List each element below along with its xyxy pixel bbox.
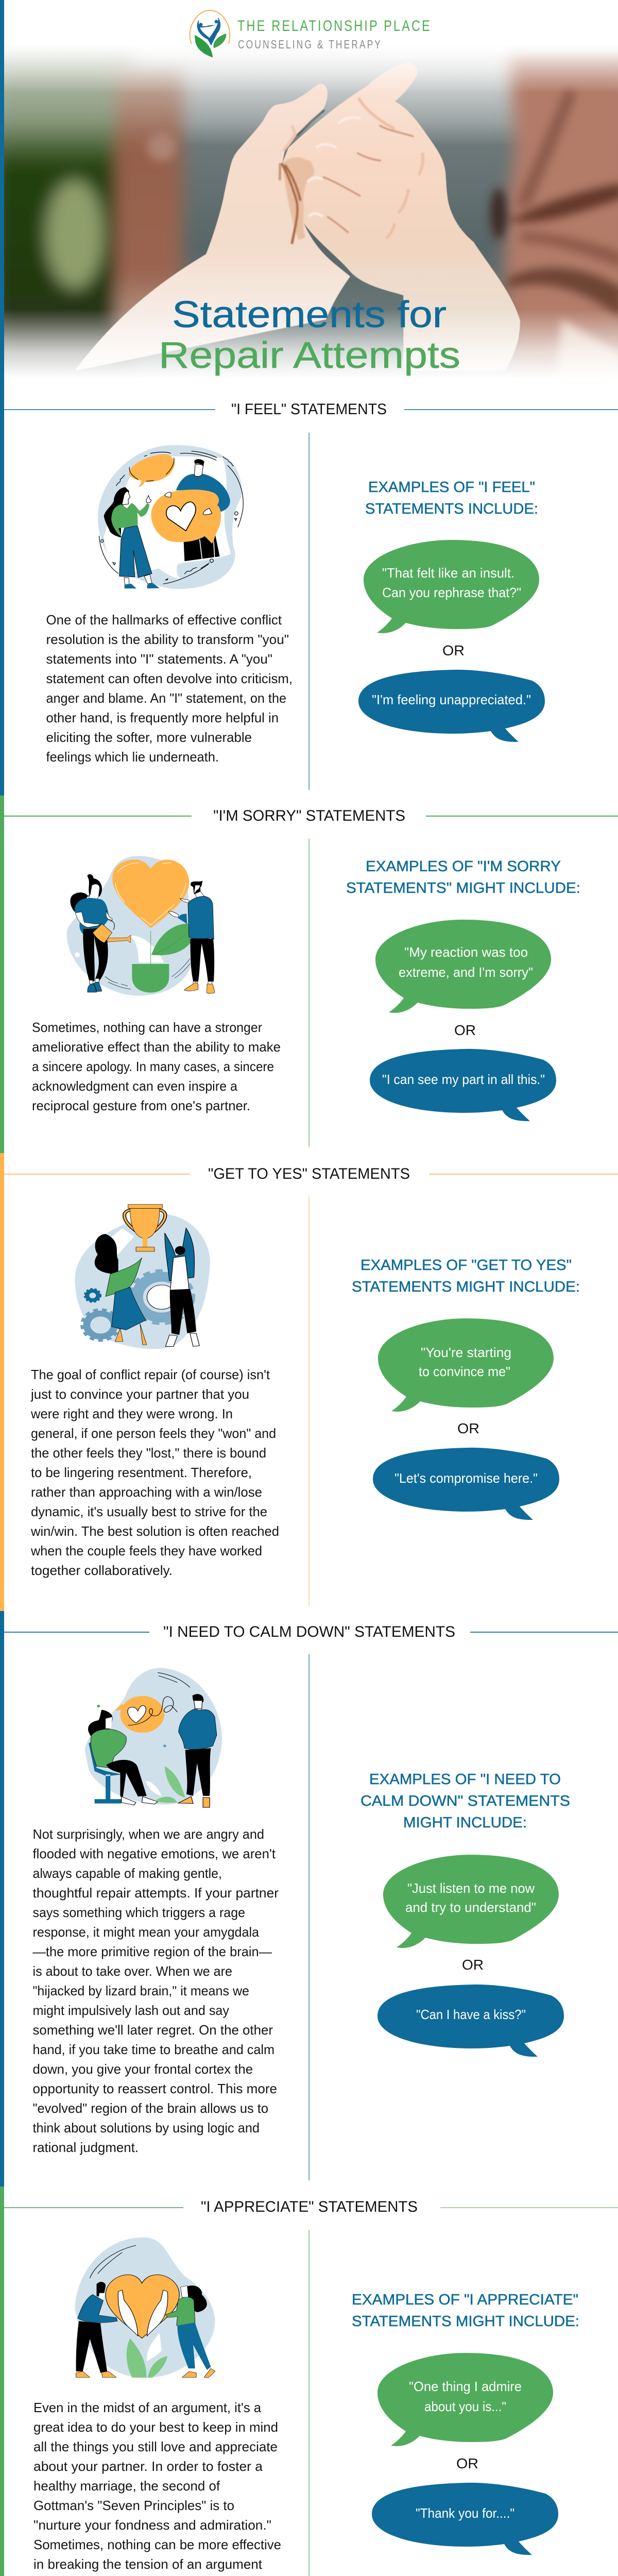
body text xyxy=(32,1020,281,1113)
examples heading: CALM DOWN" STATEMENTS xyxy=(360,1793,570,1809)
title xyxy=(159,294,460,376)
title: Statements for xyxy=(172,294,447,335)
green speech bubble: "You're starting xyxy=(421,1345,511,1360)
body text: always capable of making gentle, xyxy=(33,1866,222,1881)
green speech bubble: about you is..." xyxy=(424,2399,506,2414)
examples heading: STATEMENTS" MIGHT INCLUDE: xyxy=(346,880,580,896)
section heading: "I APPRECIATE" STATEMENTS xyxy=(201,2198,418,2215)
or label: OR xyxy=(456,2455,478,2471)
green speech bubble: "Just listen to me now xyxy=(407,1880,535,1896)
logo emblem xyxy=(190,10,230,58)
panel: I feel statements xyxy=(4,401,618,790)
body text: a sincere apology. In many cases, a sincere xyxy=(32,1059,274,1074)
body text: the other feels they "lost," there is bound xyxy=(31,1445,266,1461)
body text: something we'll later regret. On the other xyxy=(33,2022,273,2038)
illustration: couple watering a heart plant xyxy=(66,856,215,996)
panel: get to yes statements xyxy=(4,1165,618,1606)
body text: all the things you still love and appreciate xyxy=(33,2439,278,2454)
blue speech bubble: "Thank you for...." xyxy=(416,2505,514,2521)
body text: Gottman's "Seven Principles" is to xyxy=(33,2498,234,2513)
body text: Not surprisingly, when we are angry and xyxy=(33,1826,264,1842)
body text xyxy=(30,1367,279,1578)
body text: The goal of conflict repair (of course) isn't xyxy=(31,1367,270,1382)
body text: about your partner. In order to foster a xyxy=(33,2459,263,2474)
blue speech bubble: "Let's compromise here." xyxy=(394,1470,538,1486)
body text: dynamic, it's usually best to strive for the xyxy=(31,1504,267,1519)
green speech bubble xyxy=(375,920,551,1013)
body text: is about to take over. When we are xyxy=(33,1963,232,1979)
or label: OR xyxy=(454,1022,476,1038)
green speech bubble xyxy=(377,2353,553,2446)
blue speech bubble: "I'm feeling unappreciated." xyxy=(372,692,531,707)
examples heading xyxy=(360,1771,570,1831)
body text: general, if one person feels they "won" and xyxy=(31,1426,276,1441)
blue speech bubble xyxy=(373,1448,559,1520)
section heading: "I'M SORRY" STATEMENTS xyxy=(213,807,405,824)
body text: says something which triggers a rage xyxy=(33,1905,245,1920)
body text: rather than approaching with a win/lose xyxy=(31,1484,262,1500)
title: Repair Attempts xyxy=(159,335,460,376)
or label: OR xyxy=(457,1420,479,1436)
green speech bubble xyxy=(364,540,539,633)
body text: eliciting the softer, more vulnerable xyxy=(46,730,252,745)
left colour bar xyxy=(0,0,4,2576)
body text: response, it might mean your amygdala xyxy=(33,1924,260,1940)
illustration: seated woman and thinking man xyxy=(85,1668,222,1807)
examples heading: STATEMENTS MIGHT INCLUDE: xyxy=(352,2313,579,2330)
examples heading: STATEMENTS INCLUDE: xyxy=(365,501,538,517)
body text: think about solutions by using logic and xyxy=(33,2120,260,2136)
panel: I'm sorry statements xyxy=(4,807,618,1147)
blue speech bubble: "Can I have a kiss?" xyxy=(416,2007,526,2022)
body text: flooded with negative emotions, we aren't xyxy=(33,1846,276,1861)
or label: OR xyxy=(462,1957,484,1973)
illustration: couple holding a heart xyxy=(75,2238,215,2378)
blue speech bubble xyxy=(358,670,545,742)
green speech bubble: "That felt like an insult. xyxy=(382,565,514,581)
body text: other hand, is frequently more helpful in xyxy=(46,710,279,725)
section heading: "I NEED TO CALM DOWN" STATEMENTS xyxy=(163,1623,455,1640)
body text: acknowledgment can even inspire a xyxy=(32,1078,238,1094)
examples heading xyxy=(365,479,538,517)
body text xyxy=(33,1826,279,2155)
body text: down, you give your frontal cortex the xyxy=(33,2061,253,2077)
body text: statement can often devolve into criticism, xyxy=(46,671,293,686)
examples heading: EXAMPLES OF "I APPRECIATE" xyxy=(352,2292,578,2308)
body text: One of the hallmarks of effective conflict xyxy=(46,612,282,628)
examples heading xyxy=(346,858,580,896)
examples heading: EXAMPLES OF "GET TO YES" xyxy=(360,1257,572,1274)
logo tagline: COUNSELING & THERAPY xyxy=(238,38,382,51)
body text: "nurture your fondness and admiration." xyxy=(33,2517,271,2533)
body text: "hijacked by lizard brain," it means we xyxy=(33,1983,249,1998)
body text: were right and they were wrong. In xyxy=(30,1406,233,1421)
examples heading: MIGHT INCLUDE: xyxy=(403,1815,527,1831)
body text: resolution is the ability to transform "you" xyxy=(46,632,289,647)
logo name: THE RELATIONSHIP PLACE xyxy=(237,18,432,35)
body text: ameliorative effect than the ability to make xyxy=(32,1039,281,1055)
body text: just to convince your partner that you xyxy=(30,1386,249,1402)
illustration: couple with heart speech bubble xyxy=(98,445,243,589)
panel: I appreciate statements xyxy=(4,2198,618,2576)
body text: when the couple feels they have worked xyxy=(30,1543,262,1558)
body text: great idea to do your best to keep in mind xyxy=(33,2419,278,2435)
section heading: "I FEEL" STATEMENTS xyxy=(231,401,387,418)
green speech bubble: "One thing I admire xyxy=(409,2379,522,2394)
body text: —the more primitive region of the brain— xyxy=(33,1944,272,1959)
section heading: "GET TO YES" STATEMENTS xyxy=(208,1165,410,1182)
blue speech bubble: "I can see my part in all this." xyxy=(382,1072,545,1087)
body text: "evolved" region of the brain allows us to xyxy=(33,2100,268,2116)
body text: healthy marriage, the second of xyxy=(33,2478,220,2494)
body text: reciprocal gesture from one's partner. xyxy=(32,1098,250,1113)
hero photo: two hands touching xyxy=(0,44,618,392)
green speech bubble: "My reaction was too xyxy=(404,944,528,960)
examples heading xyxy=(352,2292,579,2330)
body text xyxy=(33,2400,281,2576)
body text: thoughtful repair attempts. If your partner xyxy=(33,1885,279,1901)
examples heading: EXAMPLES OF "I NEED TO xyxy=(369,1771,561,1788)
body text: together collaboratively. xyxy=(31,1563,173,1578)
blue speech bubble xyxy=(377,1985,564,2057)
body text: in breaking the tension of an argument xyxy=(33,2556,263,2572)
body text xyxy=(46,612,293,765)
green speech bubble: to convince me" xyxy=(419,1364,510,1379)
body text: to be lingering resentment. Therefore, xyxy=(31,1465,252,1480)
illustration: trophy and gears xyxy=(75,1205,210,1349)
body text: anger and blame. An "I" statement, on the xyxy=(46,690,286,706)
green speech bubble: and try to understand" xyxy=(405,1900,536,1915)
or label: OR xyxy=(442,642,465,658)
body text: might impulsively lash out and say xyxy=(33,2003,229,2018)
examples heading xyxy=(352,1257,580,1295)
logo xyxy=(190,10,432,58)
body text: win/win. The best solution is often reached xyxy=(30,1523,279,1539)
green speech bubble: Can you rephrase that?" xyxy=(382,585,521,600)
body text: hand, if you take time to breathe and calm xyxy=(33,2042,274,2057)
green speech bubble xyxy=(383,1855,559,1948)
body text: rational judgment. xyxy=(33,2140,139,2155)
body text: Even in the midst of an argument, it's a xyxy=(33,2400,262,2415)
blue speech bubble xyxy=(370,1049,556,1121)
body text: statements into "I" statements. A "you" xyxy=(46,651,272,667)
body text: feelings which lie underneath. xyxy=(46,749,219,765)
examples heading: EXAMPLES OF "I'M SORRY xyxy=(366,858,561,875)
green speech bubble: extreme, and I'm sorry" xyxy=(399,964,533,980)
body text: Sometimes, nothing can have a stronger xyxy=(32,1020,262,1035)
body text: Sometimes, nothing can be more effective xyxy=(33,2537,281,2552)
panel: I need to calm down statements xyxy=(4,1623,618,2180)
examples heading: STATEMENTS MIGHT INCLUDE: xyxy=(352,1279,580,1295)
body text: opportunity to reassert control. This more xyxy=(33,2081,277,2096)
green speech bubble xyxy=(378,1318,554,1412)
blue speech bubble xyxy=(372,2483,558,2555)
examples heading: EXAMPLES OF "I FEEL" xyxy=(368,479,535,496)
